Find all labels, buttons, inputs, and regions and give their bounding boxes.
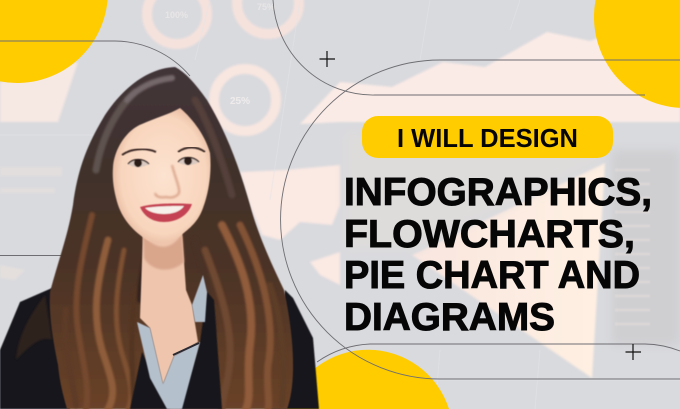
decorative world map [240, 165, 340, 240]
eyebrow left [122, 149, 156, 155]
hair strands [65, 78, 284, 409]
eyebrow right [178, 148, 205, 152]
shirt placket shadow [173, 343, 199, 355]
eye left [128, 159, 149, 167]
heading: FLOWCHARTS, [344, 213, 635, 256]
nose shading [155, 165, 179, 198]
dark hair over blazer [16, 295, 52, 360]
blazer [0, 288, 319, 409]
icon: plus top [320, 51, 335, 67]
donut label: 75% [257, 2, 275, 12]
person: smiling woman in blazer [0, 67, 319, 409]
yellow circle top left [0, 0, 108, 83]
heading: PIE CHART AND [344, 254, 640, 297]
heading: DIAGRAMS [344, 296, 555, 339]
face [113, 108, 211, 243]
neck and chest [140, 232, 198, 384]
mouth [140, 203, 192, 222]
blazer lapels [130, 292, 222, 409]
yellow circle bottom [287, 350, 449, 409]
donut label: 100% [165, 10, 188, 20]
decorative pink donuts [147, 0, 207, 44]
shirt [137, 322, 200, 409]
yellow circle top right [594, 0, 680, 108]
donut label: 25% [230, 96, 250, 107]
badge: I will design [362, 116, 613, 158]
shirt collar right [192, 275, 207, 322]
badge: I will design: I WILL DESIGN [397, 123, 578, 153]
heading [344, 171, 652, 339]
eye right [178, 157, 199, 165]
icon: plus bottom [626, 344, 641, 360]
hair mass [50, 67, 293, 409]
heading: INFOGRAPHICS, [344, 171, 652, 214]
neck shadow [143, 234, 184, 270]
